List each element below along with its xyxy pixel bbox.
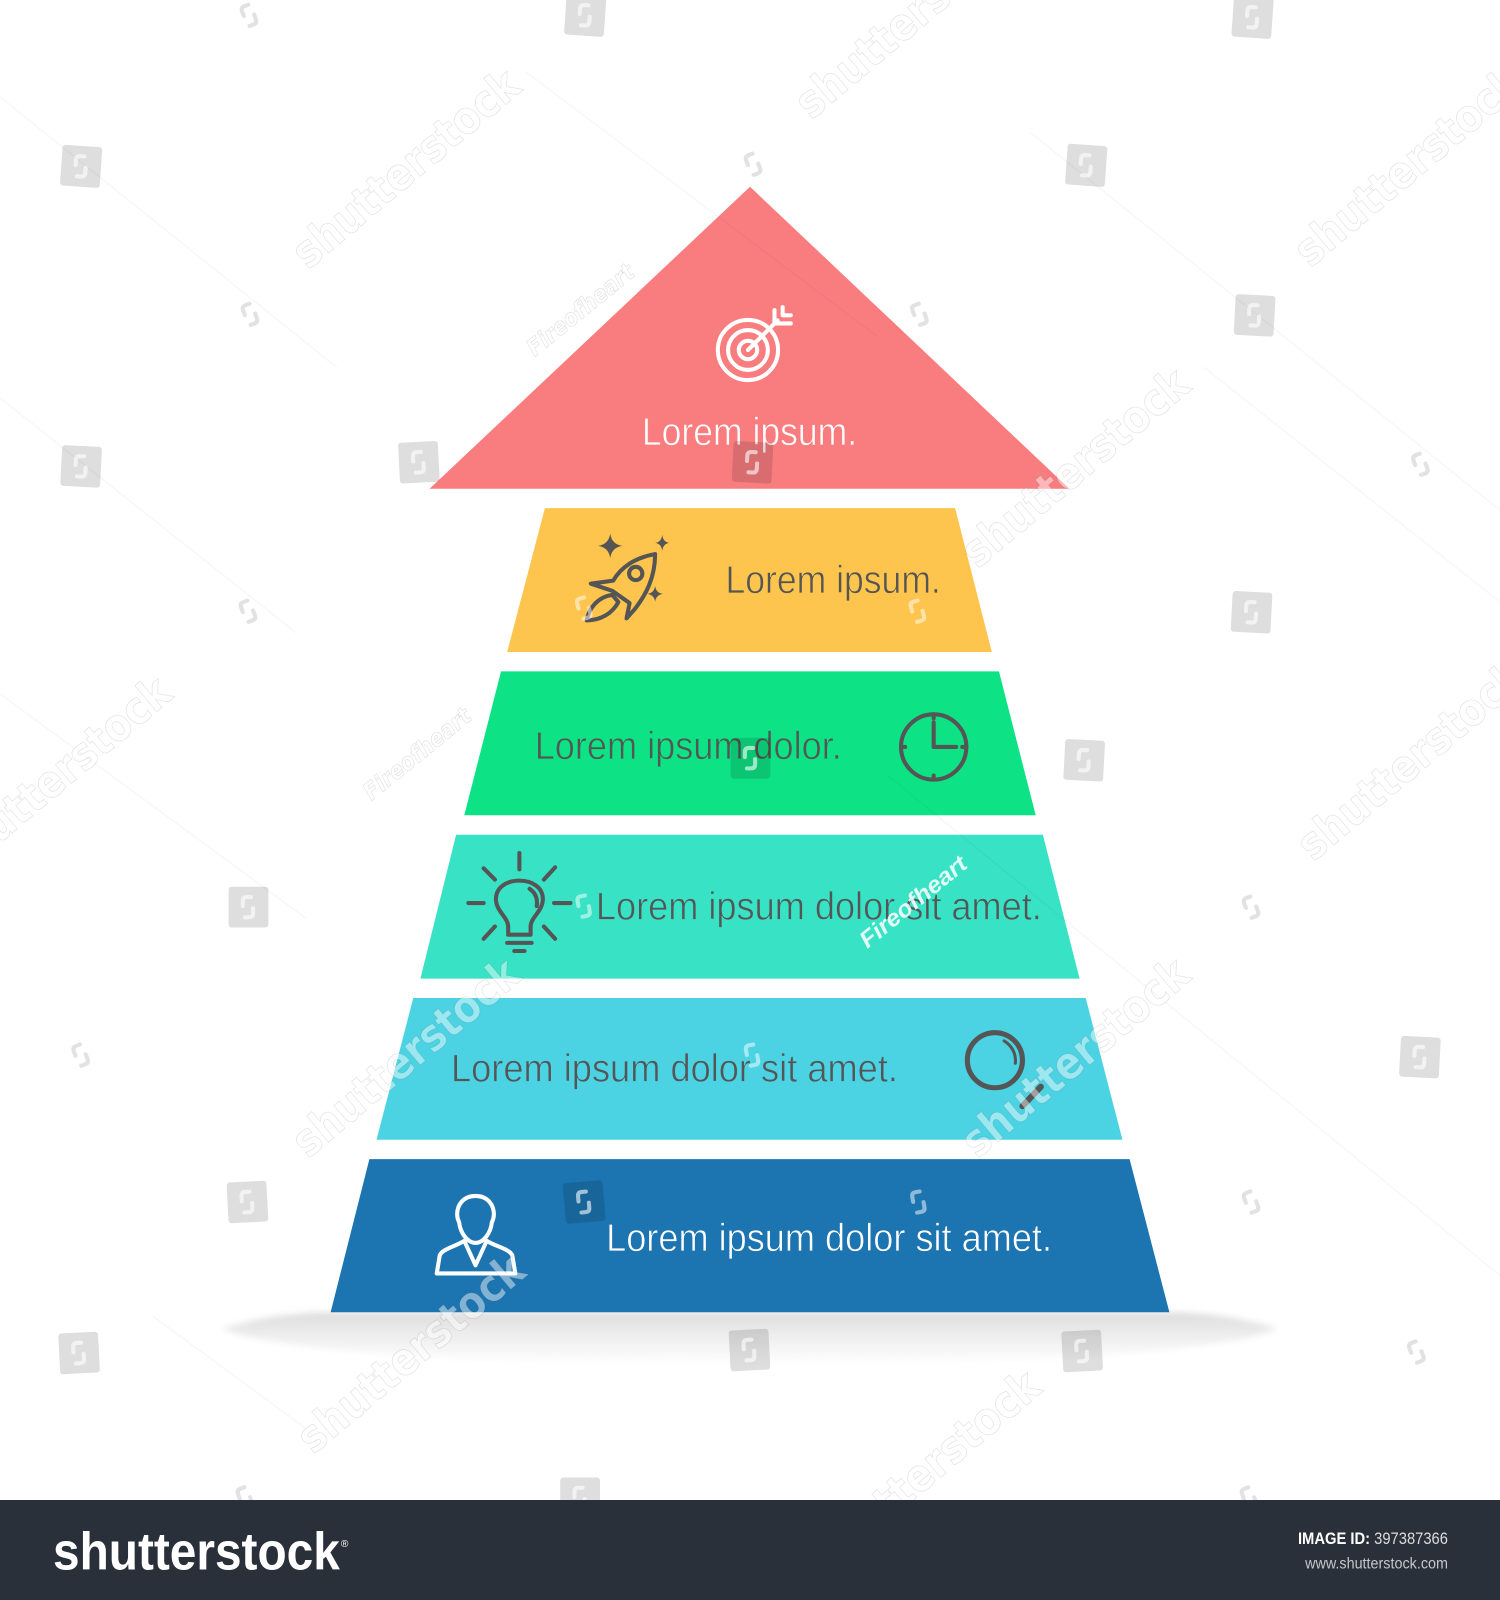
watermark overlay: shutterstock bbox=[951, 356, 1200, 578]
watermark overlay: shutterstock bbox=[286, 1242, 536, 1464]
panel: yellow tier bbox=[507, 508, 992, 652]
icon: light bulb bbox=[468, 853, 570, 951]
label: teal tier: Lorem ipsum dolor sit amet. bbox=[596, 885, 1042, 928]
watermark overlay: Fireofheart bbox=[521, 257, 641, 362]
footer url: www.shutterstock.com bbox=[1304, 1555, 1448, 1572]
icon: clock bbox=[901, 714, 966, 780]
footer logo: ® bbox=[341, 1539, 349, 1550]
icon: rocket bbox=[587, 534, 669, 620]
watermark overlay: shutterstock bbox=[281, 57, 531, 279]
panel: top arrow tier bbox=[430, 187, 1069, 489]
label: green tier: Lorem ipsum dolor. bbox=[535, 725, 842, 768]
image id: IMAGE ID: 397387366 bbox=[1298, 1530, 1448, 1548]
label: top tier: Lorem ipsum. bbox=[642, 411, 857, 454]
watermark overlay: Fireofheart bbox=[358, 701, 477, 806]
footer logo: shutterstock bbox=[53, 1522, 340, 1581]
watermark overlay: shutterstock bbox=[951, 946, 1200, 1168]
panel: teal tier bbox=[420, 835, 1080, 979]
label: yellow tier: Lorem ipsum. bbox=[726, 559, 941, 602]
icon: magnifier bbox=[967, 1033, 1041, 1106]
footer bar bbox=[0, 1500, 1500, 1600]
label: cyan tier: Lorem ipsum dolor sit amet. bbox=[451, 1048, 898, 1091]
watermark overlay: Fireofheart bbox=[854, 850, 973, 953]
label: blue tier: Lorem ipsum dolor sit amet. bbox=[606, 1217, 1052, 1260]
icon: person bbox=[437, 1196, 515, 1273]
ground shadow bbox=[222, 1312, 1278, 1365]
watermark overlay: shutterstock bbox=[802, 1358, 1051, 1580]
panel: blue base tier bbox=[331, 1159, 1169, 1312]
panel: cyan tier bbox=[377, 998, 1122, 1140]
panel: green tier bbox=[464, 671, 1036, 815]
icon: target with arrow bbox=[718, 307, 791, 380]
watermark overlay: shutterstock bbox=[281, 946, 531, 1168]
